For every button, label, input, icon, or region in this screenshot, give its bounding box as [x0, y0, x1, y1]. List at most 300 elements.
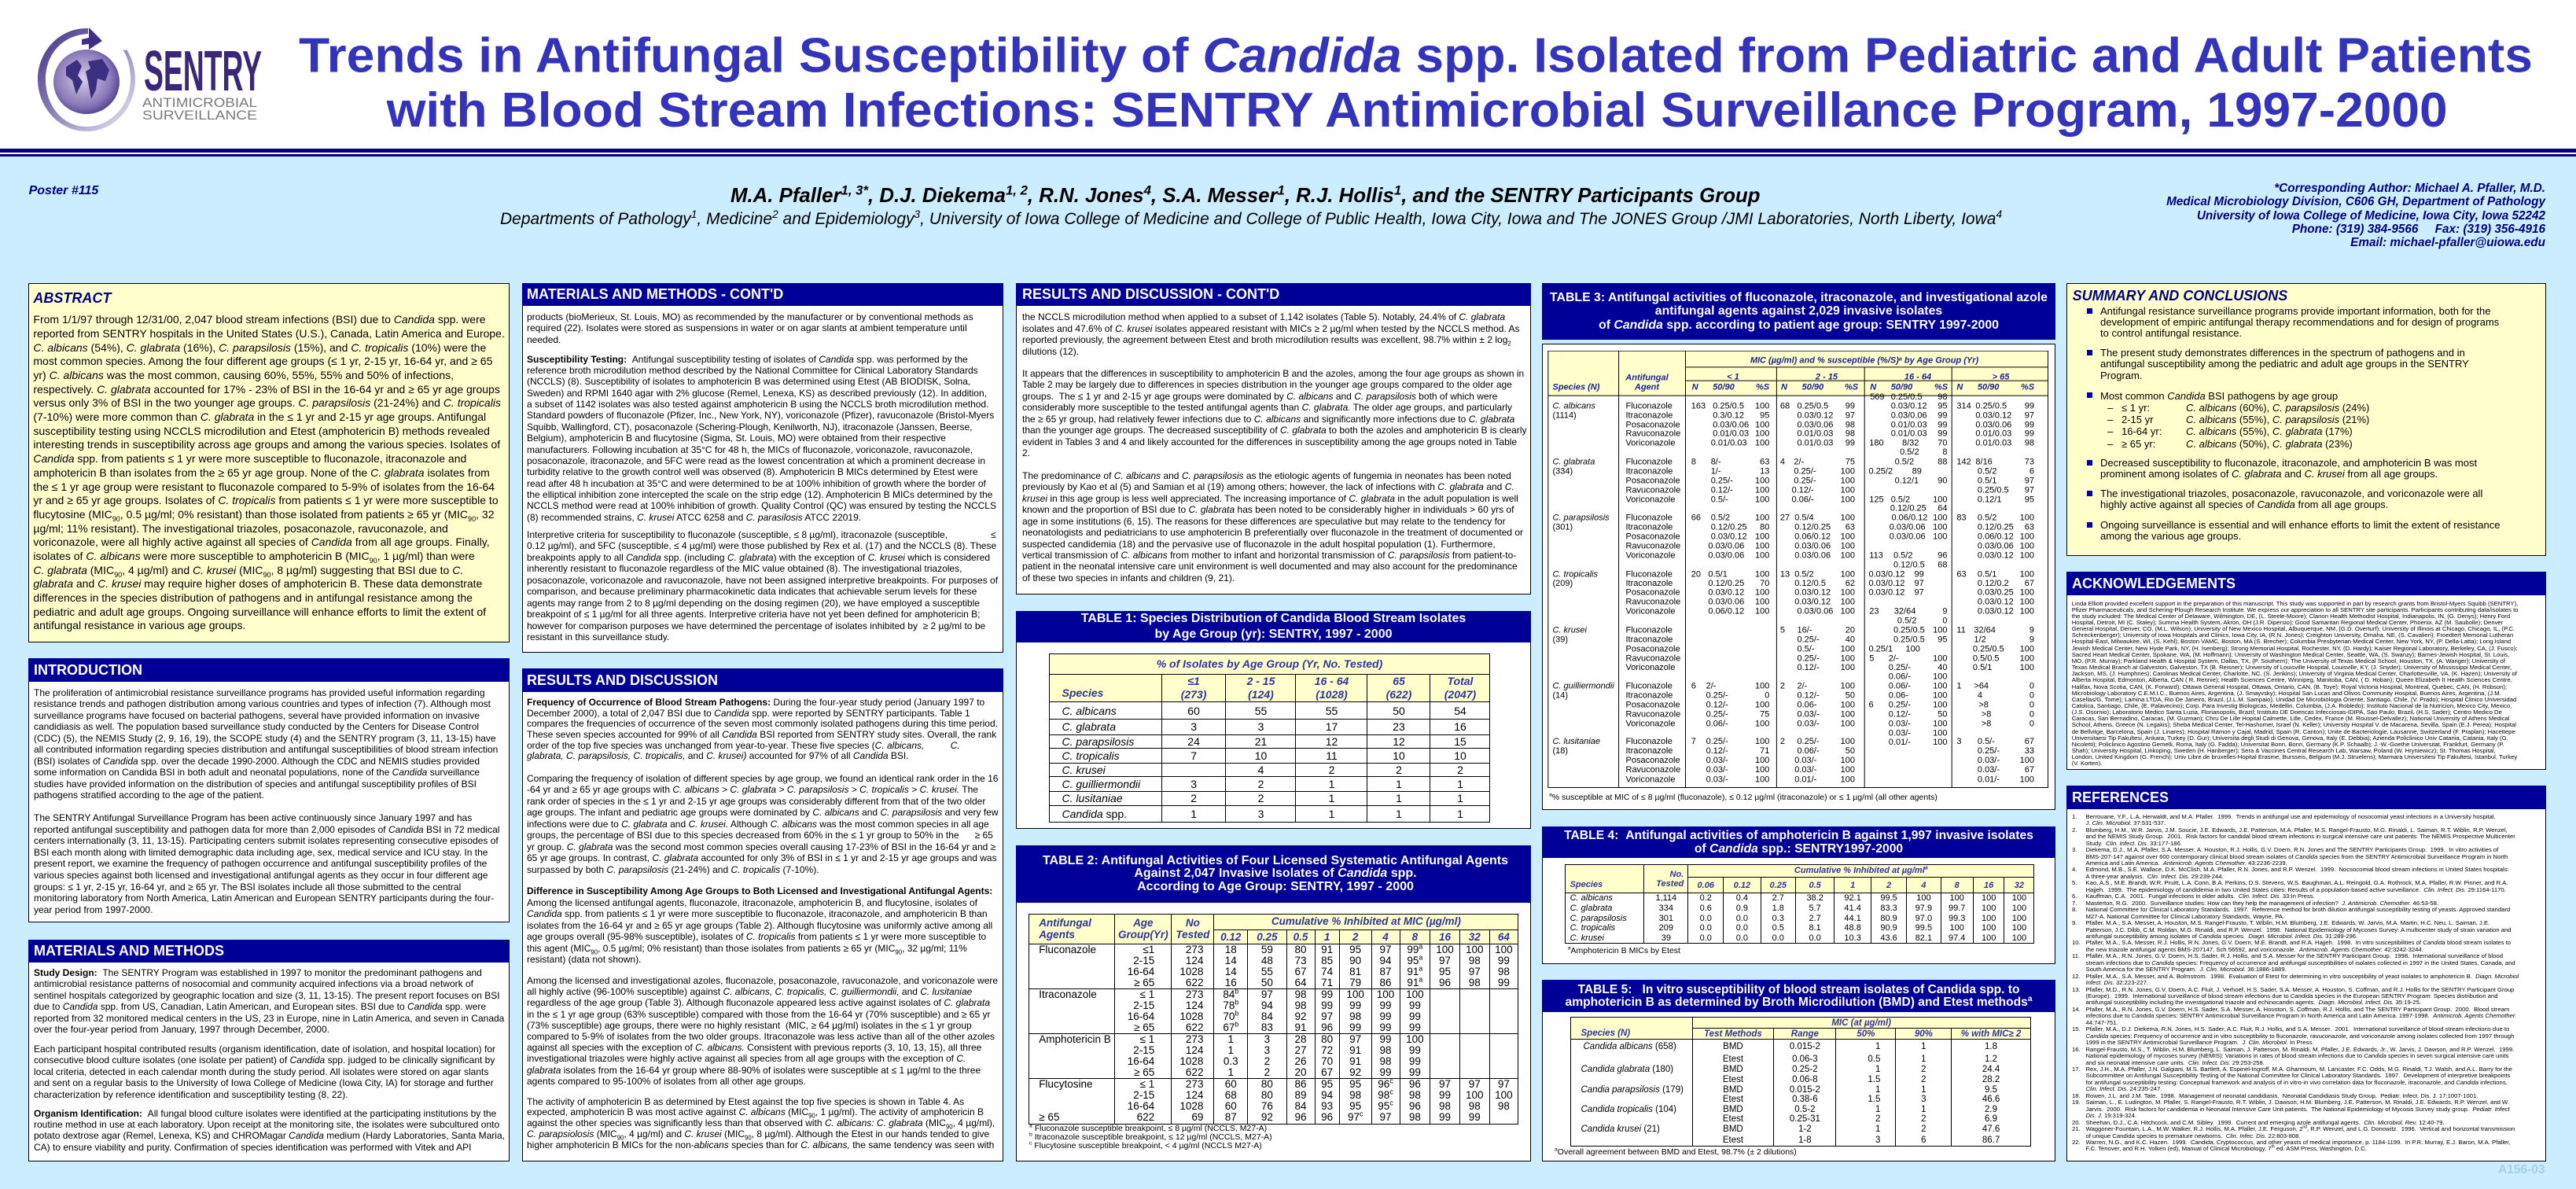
interpretive criteria	[527, 529, 999, 642]
introduction paragraph 1	[34, 687, 498, 801]
bullet 3: most common pathogens by age group: ≥ 65 yr:	[2122, 437, 2155, 450]
organism identification: CA) to ensure viability and purity. Confirmation of species identification was performed with Vitek and API	[34, 1142, 472, 1153]
table 3: MIC by species and age group: Fluconazole	[1626, 513, 1673, 522]
table 2: antifungal activities: 97	[1439, 955, 1451, 966]
table 4: amphotericin B activity: 0.0	[1700, 914, 1712, 923]
table 4: amphotericin B activity: C. albicans	[1570, 893, 1613, 903]
results continued paragraph 2: 2.	[1022, 447, 1030, 458]
table 3 footnote: a% susceptible at MIC of ≤ 8 µg/ml (fluconazole), ≤ 0.12 µg/ml (itraconazole) or ≤ 1 µg/ml (all other agents)	[1549, 792, 1938, 802]
susceptibility testing: Squibb, Wallingford, CT), posaconazole (Schering-Plough, Kenilworth, NJ), itraconazole (Janssen, Beerse,	[527, 421, 972, 433]
column: age 16 to 64	[1868, 392, 1947, 746]
reference list: Berrouane, Y.F., L.A. Herwaldt, and M.A. Pfaller. 1999. Trends in antifungal use and epidemiology of nosocomial yeast infections in a University hospital.	[2085, 813, 2496, 820]
table 1: species distribution: 1	[1396, 778, 1402, 790]
table 2: antifungal activities: Age	[1133, 917, 1154, 929]
table 2: antifungal activities: 99	[1349, 999, 1361, 1011]
reference list: Dis. J. 19:319-324.	[2085, 1112, 2136, 1119]
column: age 65 and over: 8/16	[1975, 457, 1993, 466]
table 3: MIC by species and age group: MIC (µg/ml) and % susceptible (%/S)	[1750, 355, 1899, 365]
interpretive criteria: comparison, and because preliminary pharmacokinetic data indicates that achievable serum levels for these	[527, 586, 977, 597]
table 1: species distribution: 1	[1190, 808, 1197, 820]
reference numbers: 6.	[2072, 893, 2077, 900]
introduction paragraph 1: (BSI) isolates of Candida spp. over the decade 1990-2000. Although the CDC and NEMIS studies provided	[34, 756, 480, 767]
table 5: BMD versus Etest: 0.06-8	[1792, 1075, 1818, 1084]
table 3: MIC by species and age group: Fluconazole	[1626, 569, 1673, 579]
reference list: stream infections due to Candida species: Frequency of occurrence and antifungal susceptibilities of isolates collected in 1997 in the United States, Canada, and	[2085, 959, 2515, 966]
reference list: National Committee for Clinical Laboratory Standards. 1997. Reference method for broth dilution antifungal susceptibility testing of yeasts. Approved standard	[2085, 906, 2510, 913]
acknowledgements text: Texas Medical Branch at Galveston, Galveston, TX (B. Reisner); University of Louisville Hospital, Louisville, KY, (J. Snyder); University of Mississippi Medical Center,	[2072, 664, 2512, 671]
table 5: BMD versus Etest: Range	[1791, 1029, 1819, 1039]
table 5: BMD versus Etest: 3	[1875, 1136, 1880, 1145]
table 4: amphotericin B activity: C. krusei	[1570, 933, 1604, 943]
table 2: antifungal activities: 100	[1406, 988, 1424, 1000]
study design: antimicrobial resistance patterns of nosocomial and community acquired infections via a broad network of	[34, 978, 473, 989]
table 2: antifungal activities: 97	[1379, 944, 1392, 955]
column: age under 1: 1/-	[1711, 466, 1721, 476]
reference list: and six neonatal intensive care units. Clin. Infect. Dis. 29:253-258.	[2085, 1059, 2265, 1066]
table 2: antifungal activities: 96c	[1378, 1077, 1393, 1090]
column: age 65 and over: >8	[1982, 719, 1991, 728]
column: age 16 to 64: 97	[1914, 587, 1924, 597]
column: age 65 and over: 0.12/0.2	[1978, 578, 2009, 587]
table 5: BMD versus Etest: 1	[1875, 1085, 1880, 1095]
table 5: BMD versus Etest	[1570, 1017, 2031, 1147]
heading: acknowledgements	[2066, 572, 2546, 595]
amphotericin B activity: C. parapsiolosis (MIC90, 4 µg/ml) and C. krusei (MIC90, 8 µg/ml). Although the Etest in our hands tended to give	[527, 1128, 989, 1141]
column: age 16 to 64: 0.5/2	[1900, 447, 1919, 457]
bullet 3: most common pathogens by age group	[2087, 390, 2369, 450]
table 4: amphotericin B activity: 99.5	[1915, 923, 1932, 933]
table 2: antifungal activities: 91a	[1407, 976, 1422, 988]
column: age 65 and over: 0.03/0.12	[1975, 410, 2011, 420]
azoles activity: compared to 5-9% of isolates from the two older groups. Itraconazole was less active than all of the other azoles	[527, 1031, 995, 1042]
table 1: species distribution: 1	[1329, 792, 1334, 804]
table 2: antifungal activities: 99	[1409, 1066, 1421, 1078]
column: age 65 and over: 0.5/1	[1978, 476, 1996, 485]
table 4: amphotericin B activity: 0.2	[1700, 893, 1712, 903]
reference list: Candida species: Frequency of occurrence and in vitro susceptibility to fluconazole, ravuconazole, and voriconazole among isolates collected from 1997 through	[2085, 1033, 2514, 1040]
column: age under 1: 100	[1755, 700, 1769, 709]
authors: M.A. Pfaller1, 3*, D.J. Diekema1, 2, R.N. Jones4, S.A. Messer1, R.J. Hollis1, and the SENTRY Participants Group	[730, 182, 1761, 207]
column: age 2 to 15: 0.25/-	[1798, 635, 1820, 644]
comparison by age group: yr group. C. glabrata was the second most common species overall causing 17-23% of BSI in the 16-64 yr and ≥	[527, 841, 995, 852]
susceptibility testing: read after 48 h incubation at 35°C and were determined to be at 100% inhibition of growth where the border of	[527, 478, 986, 489]
column: age 16 to 64: 0.25/-	[1889, 700, 1911, 709]
table 2: antifungal activities: 99	[1439, 1089, 1451, 1101]
table 3: MIC by species and age group: %S	[2021, 382, 2035, 392]
bullet 2: Program.	[2100, 370, 2142, 381]
column: age 2 to 15: 100	[1841, 709, 1855, 719]
table 3: MIC by species and age group: Fluconazole	[1626, 681, 1673, 690]
abstract text: C. albicans (54%), C. glabrata (16%), C. parapsilosis (15%), and C. tropicalis (10%) were the	[33, 341, 486, 354]
table 2: antifungal activities: Itraconazole	[1039, 988, 1097, 1000]
table 2: antifungal activities: 87	[1379, 966, 1392, 977]
column: age 65 and over: 97	[2025, 476, 2034, 485]
table 2: antifungal activities: 16-64	[1128, 1100, 1154, 1112]
column: age 16 to 64: 64	[1938, 503, 1947, 513]
column: age 65 and over: 100	[2020, 532, 2034, 541]
column: age 2 to 15: 50	[1846, 746, 1855, 756]
table 4: amphotericin B activity: 0.12	[1734, 881, 1750, 890]
reference list: Infect. Dis. 32:223-227.	[2085, 979, 2148, 986]
table 2: antifungal activities: 99	[1409, 1022, 1421, 1033]
table 2: antifungal activities: 2-15	[1133, 955, 1154, 966]
table 4: amphotericin B activity: 39	[1662, 933, 1671, 943]
participant hospitals: local criteria, detected in each calendar month during the study period. All isolates were stored on agar slants	[34, 1066, 488, 1077]
column: age under 1: 63	[1760, 457, 1769, 466]
column: age 16 to 64: 5	[1869, 653, 1874, 663]
interpretive criteria: resistant in this surveillance study.	[527, 631, 669, 642]
interpretive criteria: breakpoint of ≤ 1 µg/ml for all three agents. Interpretive criteria have not yet been defined for amphotericin B;	[527, 609, 980, 620]
table 4: amphotericin B activity: 0.6	[1700, 904, 1712, 913]
table 5 title: TABLE 5: In vitro susceptibility of blood stream isolates of Candida spp. to	[1577, 983, 2019, 996]
bullet 1: to control antifungal resistance.	[2100, 327, 2242, 339]
table 5: BMD versus Etest: BMD	[1723, 1085, 1743, 1095]
table 2: antifungal activities: ≤ 1	[1140, 1078, 1154, 1090]
bullet 2: antifungal susceptibility among the pediatric and adult age groups in the SENTRY	[2100, 358, 2469, 370]
table 3: MIC by species and age group: Antifungal	[1625, 373, 1669, 382]
column: age 2 to 15: 0.5/4	[1794, 513, 1814, 522]
table 5: BMD versus Etest: 86.7	[1982, 1136, 2000, 1145]
reference list: America and Latin America. Antimicrob. Agents Chemother. 43:2236-2239.	[2085, 860, 2287, 867]
reference list: Kauffman, C.A. 2001. Fungal infections in older adults. Clin. Infect. Dis. 33:In Press.	[2085, 893, 2315, 900]
code label: A156-03	[2498, 1163, 2545, 1176]
column: age 2 to 15: 0.03/-	[1798, 719, 1820, 728]
table 3: MIC by species and age group: 2 - 15	[1815, 372, 1838, 381]
reference list: A three-year analysis. Clin. Infect. Dis. 29:239-244.	[2085, 873, 2224, 880]
table 4: amphotericin B activity: 41.4	[1844, 904, 1861, 913]
column: age 65 and over: 100	[2020, 644, 2034, 653]
table 5: BMD versus Etest: 24.4	[1982, 1065, 2000, 1074]
table 5: BMD versus Etest: 1.5	[1868, 1075, 1880, 1084]
column: age 65 and over: >8	[1982, 709, 1991, 719]
table 3: MIC by species and age group: (1114)	[1552, 410, 1577, 420]
table 1: species distribution: 23	[1393, 720, 1405, 733]
column: age under 1: 0.06/0.12	[1708, 606, 1744, 616]
reference list: for antifungal susceptibility testing: Conceptual framework and analysis of in vitro-in vivo correlation data for fluconazole, itraconazole, and Candida infections.	[2085, 1079, 2508, 1086]
study design	[34, 967, 505, 1035]
panel: table 4	[1542, 826, 2055, 964]
table 4: amphotericin B activity	[1565, 864, 2034, 944]
table 1: species distribution: 11	[1326, 749, 1338, 762]
interpretive criteria: ≤	[991, 529, 996, 540]
table 2: antifungal activities: 84	[1261, 1010, 1273, 1022]
methods continued text: needed.	[527, 334, 561, 345]
bullet 6: Ongoing surveillance is essential and will enhance efforts to limit the extent of resistance	[2100, 519, 2500, 531]
results continued paragraph 1: the NCCLS microdilution method when applied to a subset of 1,142 isolates (Table 5). Notably, 24.4% of C. glabrata	[1022, 311, 1505, 322]
bullet 2	[2087, 347, 2469, 381]
column: age 16 to 64: 0.5/2	[1893, 550, 1912, 560]
table 5: BMD versus Etest: 0.06-3	[1792, 1055, 1818, 1064]
table 2: antifungal activities: 622	[1186, 977, 1203, 988]
table 3: MIC by species and age group: Posaconazole	[1626, 420, 1680, 429]
amphotericin B activity: The activity of amphotericin B as determined by Etest against the top five species is shown in Table 4. As	[527, 1096, 964, 1107]
panel: summary and conclusions	[2066, 283, 2546, 556]
table 1: species distribution: 1	[1396, 792, 1402, 804]
table 4: amphotericin B activity: 99.5	[1880, 893, 1897, 903]
study design: due to Candida spp. from US, Canadian, Latin American, and European sites. BSI due to Candida spp. were	[34, 1001, 486, 1012]
table 2: antifungal activities: 98	[1409, 1111, 1421, 1123]
corresponding author: Email: michael-pfaller@uiowa.edu	[2350, 236, 2545, 249]
reference numbers	[2072, 813, 2081, 1146]
poster number: Poster #115	[29, 184, 98, 197]
acknowledgements text: Halifax, Nova Scotia, CAN, (K. Forward); Ottawa General Hospital, Ottawa, Ontario, CAN, (B. Toye); Royal Victoria Hospital, Montreal, Quebec, CAN, (H. Robson);	[2072, 683, 2507, 690]
column: age 16 to 64: 2/-	[1889, 653, 1899, 663]
column: age 2 to 15: 100	[1841, 755, 1855, 764]
table 3: MIC by species and age group: N	[1956, 382, 1963, 392]
results continued paragraph 2: than the younger age groups. The decreased susceptibility of C. glabrata to both the azoles and amphotericin B is clearly	[1022, 425, 1527, 436]
column: age 2 to 15: 0.25/-	[1794, 476, 1816, 485]
column: age 2 to 15: 99	[1846, 438, 1855, 447]
reference list: Pfaller, M.A., S.A. Messer, R.J. Hollis, R.N. Jones, G.V. Doern, M.E. Brandt, and R.A. Hajjeh. 1998. In vitro susceptibilities of Candida blood stream isolates to	[2085, 939, 2511, 946]
table 2: antifungal activities: 64	[1498, 931, 1510, 943]
susceptibility testing	[527, 354, 996, 523]
acknowledgements text	[2071, 599, 2519, 767]
column: age 65 and over: 0.5/1	[1973, 662, 1992, 672]
table 5: BMD versus Etest: Test Methods	[1704, 1029, 1762, 1039]
panel: materials and methods continued	[522, 283, 1003, 653]
table 5: BMD versus Etest: 2	[1921, 1114, 1926, 1124]
table 2: antifungal activities: 98	[1469, 977, 1481, 988]
table 2: antifungal activities: 95	[1349, 1100, 1361, 1112]
bullet 3: most common pathogens by age group: 16-64 yr:	[2122, 425, 2162, 437]
table 5: BMD versus Etest: 3	[1921, 1095, 1926, 1104]
table 3: MIC by species and age group: Fluconazole	[1626, 401, 1673, 410]
column: age 65 and over: 63	[1956, 569, 1967, 579]
table 4: amphotericin B activity: Cumulative % Inhibited at µg/mla	[1794, 865, 1928, 875]
table 3: MIC by species and age group: Voriconazole	[1626, 662, 1675, 672]
heading: results continued: RESULTS AND DISCUSSION - CONT'D	[1022, 286, 1279, 302]
column: age 16 to 64: 113	[1869, 550, 1883, 560]
interpretive criteria: however for comparison purposes we have determined the percentage of isolates inhibited by ≥ 2 µg/ml to be	[527, 620, 985, 631]
abstract text: versus only 3% of BSI in the two younger age groups. C. parapsilosis (21-24%) and C. tropicalis	[33, 396, 501, 409]
table 2: antifungal activities: 14	[1225, 966, 1237, 977]
table 2: antifungal activities: 92	[1295, 1010, 1307, 1022]
table 5: BMD versus Etest: 2	[1921, 1125, 1926, 1134]
column: age 2 to 15: 0.25/-	[1798, 653, 1820, 663]
reference list: the new triazole antifungal agents BMS-207147, Sch 56592, and voriconazole. Antimicrob. Agents Chemother. 42:3242-3244.	[2085, 946, 2423, 953]
table 4: amphotericin B activity: 10.3	[1844, 933, 1861, 943]
table 2: antifungal activities: Antifungal	[1039, 917, 1091, 929]
table 2: antifungal activities: 96	[1295, 1111, 1307, 1123]
column: age under 1: 163	[1691, 401, 1706, 410]
comparison by age group: groups, the percentage of BSI due to this species decreased from 60% in the ≤ 1 yr group to 50% in the ≥ 65	[527, 830, 993, 841]
column: age 65 and over: 0	[2030, 700, 2034, 709]
table 2: antifungal activities: 98	[1379, 1044, 1392, 1056]
table 3: MIC by species and age group: Ravuconazole	[1626, 485, 1680, 495]
column: age under 1: 7	[1691, 736, 1696, 745]
table 3: MIC by species and age group: (39)	[1552, 635, 1568, 644]
table 2: antifungal activities: 59	[1261, 944, 1273, 955]
table 2: antifungal activities: 99a	[1407, 943, 1422, 955]
table 4: amphotericin B activity: 0.0	[1736, 914, 1748, 923]
column: age 16 to 64: 0.12/1	[1895, 476, 1919, 485]
table 2: antifungal activities: 92	[1261, 1111, 1273, 1123]
column: age 65 and over: 0	[2030, 719, 2034, 728]
table 2: antifungal activities: 3	[1264, 1033, 1270, 1045]
table 2: antifungal activities: 1	[1228, 1044, 1234, 1056]
table 5: BMD versus Etest: Candida krusei (21)	[1581, 1125, 1660, 1134]
table 4: amphotericin B activity: 0.0	[1736, 923, 1748, 933]
column: age 65 and over: 0.01/-	[1978, 775, 2000, 784]
table 2: antifungal activities: 99	[1379, 1022, 1392, 1033]
table 2: antifungal activities: 100	[1495, 1089, 1513, 1101]
table 4: amphotericin B activity: 0.06	[1698, 881, 1714, 890]
column: age 16 to 64: 99	[1938, 410, 1947, 420]
column: age under 1: 100	[1755, 606, 1769, 616]
interpretive criteria: inherently resistant to fluconazole regardless of the MIC value obtained (8). The investigational triazoles,	[527, 563, 962, 574]
table 2: antifungal activities: 98	[1439, 1100, 1451, 1112]
organism identification: routine method in use at each laboratory. Upon receipt at the monitoring site, the isolates were subcultured onto	[34, 1119, 499, 1130]
table 2: antifungal activities: 1	[1228, 1033, 1234, 1045]
difference in susceptibility: age groups overall (95-98% susceptible), isolates of C. tropicalis from patients ≤ 1 yr were more susceptible to	[527, 931, 986, 942]
table 4: amphotericin B activity: 1,114	[1655, 893, 1676, 903]
column: age 16 to 64: 6	[1868, 700, 1874, 709]
table 2: antifungal activities: 73	[1295, 955, 1307, 966]
table 1: species distribution: C. krusei	[1062, 764, 1106, 776]
table 4: amphotericin B activity: C. parapsilosis	[1570, 914, 1627, 923]
table 5: BMD versus Etest: 1	[1921, 1105, 1926, 1114]
column: age 16 to 64: 100	[1906, 644, 1920, 653]
azoles activity: agents compared to 95-100% of isolates from all other age groups.	[527, 1076, 806, 1087]
table 2: antifungal activities: 99	[1321, 999, 1333, 1011]
results continued paragraph 3: suspected candidemia (18) and the pervasive use of fluconazole in the adult hospital population (1). Furthermore,	[1022, 538, 1496, 549]
heading: results continued	[1016, 283, 1531, 306]
table 2: antifungal activities: 100	[1436, 944, 1454, 955]
frequency of occurrence	[527, 697, 998, 761]
table 4: amphotericin B activity: 97.0	[1915, 914, 1932, 923]
bullet 2: The present study demonstrates differences in the spectrum of pathogens and in	[2100, 347, 2465, 359]
reference list: 44:747-751.	[2085, 1019, 2118, 1026]
column: age 2 to 15: 100	[1841, 681, 1855, 690]
table 2: antifungal activities: 99	[1439, 1111, 1451, 1123]
reference numbers: 15.	[2072, 1025, 2081, 1033]
column: age 65 and over: 100	[2020, 775, 2034, 784]
results continued paragraph 3: krusei in this age group is less well appreciated. The increasing importance of C. glabrata in the adult population is well	[1022, 493, 1518, 504]
table 3: MIC by species and age group: Ravuconazole	[1626, 709, 1680, 719]
acknowledgements text: Pfizer Pharmaceuticals, and Schering-Plough Research Institute. We express our appreciation to all SENTRY site participants. Participants contributing data/isolates to	[2072, 606, 2519, 613]
introduction paragraph 1: surveillance programs have focused on bacterial pathogens, several have provided information on invasive	[34, 710, 480, 721]
column: age 2 to 15: 0.03/-	[1794, 765, 1817, 775]
table 4: amphotericin B activity: C. glabrata	[1570, 904, 1612, 913]
acknowledgements text: School, Athens, Greece (N. Legakis); Sheba Medical Center, Tel-Hashomer, Israel (N. Keller); University Hospital V. de Macarena, Sevilla, Spain (E.J. Perea); Hospital	[2072, 721, 2516, 728]
table 3: MIC by species and age group: Ravuconazole	[1626, 429, 1680, 438]
column: age under 1: 0.06/-	[1706, 719, 1728, 728]
table 5 title: amphotericin B as determined by Broth Microdilution (BMD) and Etest methodsa	[1566, 994, 2032, 1008]
table 1: species distribution: Species	[1062, 687, 1103, 699]
table 3: MIC by species and age group: Itraconazole	[1626, 690, 1673, 700]
table 2 title: Against 2,047 Invasive Isolates of Candida spp.	[1134, 867, 1417, 880]
column: age 2 to 15: 100	[1841, 606, 1855, 616]
table 5: BMD versus Etest: 1	[1875, 1042, 1880, 1051]
table 2: antifungal activities: 87	[1225, 1111, 1237, 1123]
table 4: amphotericin B activity: 0.0	[1736, 933, 1748, 943]
column: age 16 to 64: 0.5/2	[1897, 616, 1916, 625]
column: age 16 to 64: 100	[1933, 681, 1947, 690]
table 2: antifungal activities: 79	[1349, 977, 1361, 988]
table 5: BMD versus Etest: Etest	[1723, 1095, 1743, 1104]
table 3: MIC by species and age group: Voriconazole	[1626, 719, 1675, 728]
abstract text: From 1/1/97 through 12/31/00, 2,047 blood stream infections (BSI) due to Candida spp. were	[33, 313, 486, 326]
column: age 2 to 15: 0.03/0.06	[1794, 550, 1831, 560]
methods continued text	[527, 311, 973, 345]
column: age 16 to 64: 90	[1938, 476, 1947, 485]
table 3: MIC by species and age group: Ravuconazole	[1626, 541, 1680, 550]
bullet 3: most common pathogens by age group: –	[2107, 402, 2113, 414]
acknowledgements text: Catolica, Santiago, Chile, (E. Palavecino); Corp. Para Investig Biologicas, Medellin, Columbia, (J.A. Robledo); Instituto Nacional de la Nutricion, Mexico City, Mexico,	[2072, 702, 2512, 709]
table 5: BMD versus Etest: 1	[1921, 1042, 1926, 1051]
table 4: amphotericin B activity: 0.25	[1770, 881, 1787, 890]
reference numbers: 7.	[2072, 900, 2077, 907]
table 4: amphotericin B activity: 99.7	[1949, 904, 1965, 913]
reference list: and the NEMIS Study Group. 2001. Risk factors for candidal blood stream infections in surgical intensive care unit patients: The NEMIS Prospective Multicenter	[2085, 833, 2515, 840]
bullet 1: development of empiric antifungal therapy recommendations and for design of programs	[2100, 316, 2499, 328]
table 5: BMD versus Etest: 0.015-2	[1790, 1085, 1820, 1095]
table 2: antifungal activities: 99	[1379, 1033, 1392, 1045]
table 5: BMD versus Etest: 1-8	[1798, 1136, 1812, 1145]
column: age 16 to 64: 569	[1870, 392, 1885, 401]
column: age 2 to 15: 0.03/0.06	[1798, 420, 1833, 429]
table 4: amphotericin B activity: 16	[1984, 881, 1993, 890]
column: age 2 to 15: 100	[1841, 644, 1855, 653]
table 2: antifungal activities: 95	[1439, 966, 1451, 977]
table 3: MIC by species and age group: Voriconazole	[1626, 495, 1675, 504]
column: age 65 and over: 100	[2020, 513, 2034, 522]
table 2: antifungal activities: 99	[1379, 1010, 1392, 1022]
column: age 2 to 15: 0.06/-	[1798, 746, 1820, 756]
table 3: MIC by species and age group: > 65	[1993, 372, 2010, 381]
table 1: species distribution: 3	[1190, 778, 1197, 790]
heading: acknowledgements: ACKNOWLEDGEMENTS	[2072, 576, 2236, 591]
participant hospitals	[34, 1044, 495, 1100]
acknowledgements text: (J.S. Osornio); Laboratorio Medico Santa Luzia, Florianopolis, Brazil; Instituto DE Doencas Infecciosas-IDIPA, Sao Paulo, Brazil, (H.S. Sader); Centro Medico De	[2072, 709, 2502, 716]
table 5: BMD versus Etest: 1	[1875, 1105, 1880, 1114]
table 1: species distribution: ≤1	[1187, 675, 1200, 687]
abstract text: pediatric and adult age groups. Ongoing surveillance will enhance efforts to limit the extent of	[33, 606, 486, 618]
column: age 2 to 15: 0.03/0.06	[1794, 541, 1831, 550]
column: age under 1: 100	[1755, 541, 1769, 550]
table 3: MIC by species and age group: C. guilliermondii	[1552, 681, 1614, 690]
table 5: BMD versus Etest: 28.2	[1982, 1075, 2000, 1084]
table 1: species distribution: 1	[1457, 792, 1463, 804]
table 2: antifungal activities: 98	[1469, 1100, 1481, 1112]
column: age 65 and over: 0.25/0.5	[1978, 485, 2009, 495]
table 5: BMD versus Etest: 0.38-6	[1792, 1095, 1818, 1104]
table 2: antifungal activities: 97	[1349, 1033, 1361, 1045]
reference numbers: 17.	[2072, 1066, 2081, 1073]
table 1: species distribution: 55	[1326, 705, 1338, 717]
interpretive criteria: Interpretive criteria for susceptibility to fluconazole (susceptible, ≤ 8 µg/ml), itraconazole (susceptible,	[527, 529, 948, 540]
table 5: BMD versus Etest: Candida tropicalis (104)	[1581, 1105, 1676, 1114]
column: age 2 to 15: 0.12/-	[1798, 690, 1820, 700]
column: age 16 to 64: 0.5/2	[1891, 495, 1910, 504]
reference list: Pfaller, M.A., S.A. Messer, and A. Bolmstrom. 1998. Evaluation of Etest for determining in vitro susceptibility of yeast isolates to amphotericin B. Diagn. Microbiol	[2085, 973, 2519, 980]
column: age 65 and over: 9	[2030, 625, 2034, 635]
table 2: antifungal activities: 2-15	[1133, 1044, 1154, 1056]
susceptibility testing: a subset of 1142 isolates was also tested against amphotericin B using the NCCLS broth microdilution method.	[527, 399, 988, 410]
table 4: amphotericin B activity: 100	[2012, 914, 2026, 923]
table 1: species distribution: % of Isolates by Age Group (Yr, No. Tested)	[1157, 657, 1382, 670]
bullet 4	[2087, 457, 2477, 480]
table 4: amphotericin B activity: 0.0	[1772, 933, 1784, 943]
table 2: antifungal activities: No	[1186, 917, 1200, 929]
table 4: amphotericin B activity: 80.9	[1880, 914, 1897, 923]
table 3: MIC by species and age group: Fluconazole	[1626, 736, 1673, 745]
table 2: antifungal activities: ≥ 65	[1134, 1066, 1154, 1078]
column: age under 1	[1691, 401, 1769, 784]
table 2: antifungal activities: 94	[1261, 999, 1273, 1011]
column: age 2 to 15: 0.03/0.12	[1794, 597, 1831, 606]
acknowledgements text: Hospital-East, Milwaukee, WI, (S. Kehl); Boston VAMC, Boston, MA (S. Brecher); Columbia Presbyterian Medical Center, New York, NY, (P. Della-Latta); Long Island	[2072, 638, 2511, 645]
